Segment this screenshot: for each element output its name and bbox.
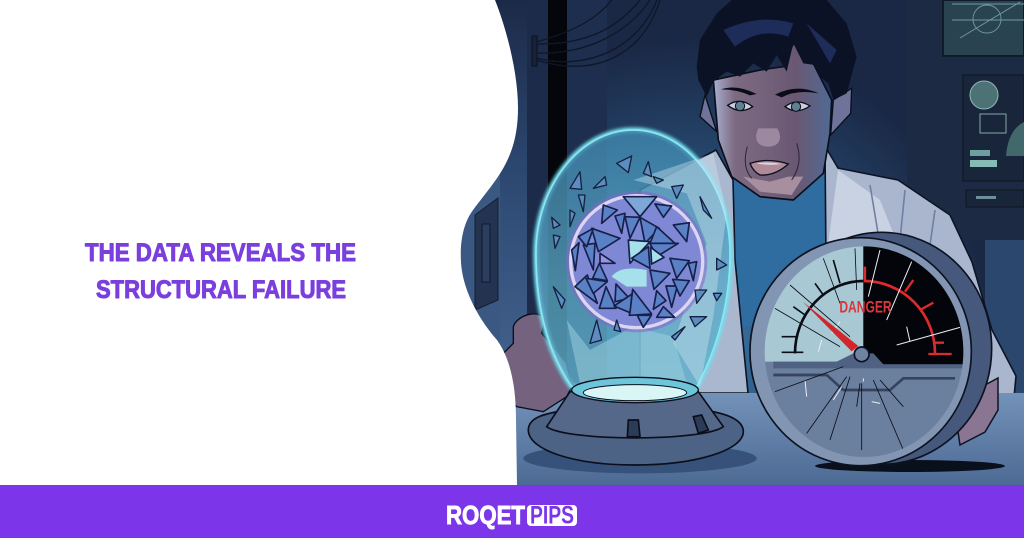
needle hub: [854, 347, 869, 362]
title: STRUCTURAL FAILURE: [96, 276, 346, 304]
title: [85, 239, 356, 304]
left hand: [500, 314, 572, 412]
pedestal: [528, 377, 743, 465]
black scale: [782, 260, 863, 353]
icon: cracked danger gauge: [749, 232, 992, 465]
flying shards: [552, 156, 727, 343]
table shadow of base: [523, 443, 757, 473]
hair: [697, 0, 857, 100]
ears: [700, 88, 852, 135]
scientist: sweater: [728, 160, 840, 330]
needle: [803, 302, 858, 351]
eyes: [721, 87, 819, 111]
nose and mouth: [745, 128, 799, 180]
wall monitors: [943, 0, 1024, 207]
danger label: DANGER: [839, 298, 892, 317]
footer bar: [0, 485, 1024, 538]
face: [713, 43, 832, 200]
logo: PIPS: [530, 502, 574, 530]
cracks: [805, 250, 960, 403]
gauge dial: [764, 246, 964, 457]
right hand on gauge: [957, 378, 998, 445]
wall cables: [532, 0, 660, 66]
shattered sphere: [566, 191, 707, 332]
title: THE DATA REVEALS THE: [85, 239, 356, 267]
table: [500, 393, 1024, 485]
hologram dome: [536, 130, 730, 387]
white curved panel: [0, 0, 518, 485]
chin highlight: [743, 177, 803, 195]
scientist: head: [697, 0, 857, 200]
logo badge: [527, 505, 577, 526]
gauge shadow: [815, 460, 1005, 472]
scene background: [460, 0, 1024, 485]
gauge casing: [772, 232, 992, 464]
logo: ROQET: [446, 500, 525, 530]
icon: hologram projector with shattering sphere: [500, 130, 757, 473]
gauge front ring: [750, 238, 971, 466]
scientist: lab coat: [640, 146, 1016, 445]
red scale: [864, 267, 952, 354]
